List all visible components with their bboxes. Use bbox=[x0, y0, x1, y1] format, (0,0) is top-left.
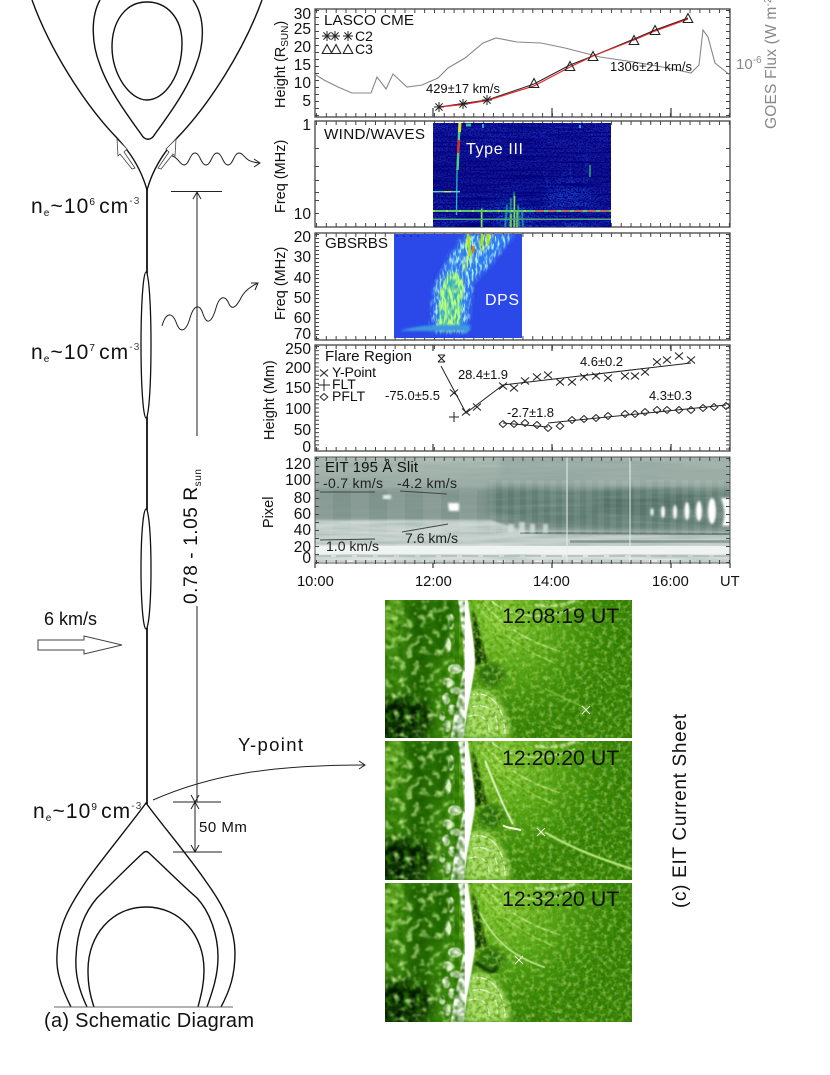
label: density 10^6: ~10 bbox=[50, 195, 89, 218]
C2 data points bbox=[434, 95, 492, 112]
y axis numbers: 50 bbox=[294, 290, 311, 307]
y axis numbers: 200 bbox=[285, 360, 311, 377]
rate labels: 28.4±1.9 bbox=[458, 367, 508, 382]
y axis title: Freq (MHz) bbox=[273, 247, 289, 320]
image: 12:32:20 UT: 12:32:20 UT bbox=[502, 887, 619, 911]
arrow: current sheet length bbox=[171, 192, 222, 802]
right axis label: -6 bbox=[753, 55, 762, 66]
panel: GBSRBS spectrogram bbox=[273, 229, 730, 343]
C3 data points bbox=[529, 14, 693, 88]
legend: FLT bbox=[332, 376, 356, 392]
rate labels: 4.6±0.2 bbox=[580, 354, 623, 369]
spectrogram image bbox=[433, 123, 611, 227]
y axis numbers: 0 bbox=[302, 550, 311, 567]
right axis label: GOES Flux (W m bbox=[763, 6, 780, 129]
label: density 10^7: cm bbox=[99, 341, 129, 364]
panel: LASCO CME height-time bbox=[273, 0, 780, 129]
time axis labels: 12:00 bbox=[415, 574, 452, 590]
label: density 10^7: n bbox=[31, 341, 44, 364]
speed labels bbox=[426, 59, 692, 96]
y axis numbers: 20 bbox=[294, 229, 311, 246]
spectrogram label: Type III bbox=[466, 141, 523, 158]
slit image bbox=[316, 458, 730, 562]
speed labels: 1306±21 km/s bbox=[610, 59, 692, 74]
label: density 10^9: cm bbox=[101, 800, 131, 823]
y axis numbers: 25 bbox=[294, 21, 311, 38]
label: density 10^6: n bbox=[31, 195, 44, 218]
time axis labels bbox=[297, 574, 740, 590]
panel frame bbox=[315, 9, 730, 117]
y axis numbers: 100 bbox=[285, 472, 311, 489]
arrow: Y-point to EIT images bbox=[153, 761, 365, 800]
legend: Y-Point bbox=[332, 364, 376, 380]
caption: EIT current sheet: (c) EIT Current Sheet bbox=[670, 713, 691, 908]
speed labels: 1.0 km/s bbox=[326, 538, 379, 554]
panel frame bbox=[315, 233, 730, 340]
label: density 10^6: -3 bbox=[129, 196, 140, 207]
label: density 10^7: 7 bbox=[89, 343, 96, 354]
PFLT data bbox=[499, 402, 730, 432]
y axis numbers bbox=[294, 6, 311, 110]
label: density 10^7: e bbox=[44, 354, 50, 365]
slit speed fit lines bbox=[320, 491, 448, 540]
spectrogram label: DPS bbox=[485, 292, 519, 309]
label: density 10^9: ~10 bbox=[52, 800, 91, 823]
y axis numbers: 50 bbox=[294, 422, 311, 439]
dimension: 50 Mm bbox=[173, 802, 247, 852]
y axis numbers: 40 bbox=[294, 522, 311, 539]
panel frame bbox=[315, 345, 730, 451]
y axis title: SUN bbox=[280, 26, 291, 47]
arrow: inflow bbox=[38, 636, 122, 654]
label: density 10^7: -3 bbox=[129, 342, 140, 353]
FLT data bbox=[449, 412, 459, 422]
time axis labels: UT bbox=[720, 574, 740, 590]
label: density 10^9: -3 bbox=[131, 801, 142, 812]
Y-point data bbox=[438, 352, 695, 416]
y axis numbers: 30 bbox=[294, 249, 311, 266]
icon: outflow arrows bbox=[117, 139, 176, 169]
image: 12:20:20 UT: 12:20:20 UT bbox=[502, 746, 619, 770]
image: 12:20:20 UT bbox=[367, 741, 632, 886]
time axis labels: 14:00 bbox=[533, 574, 570, 590]
upper flux rope loops bbox=[32, 0, 262, 190]
label: density 10^9: 9 bbox=[91, 802, 98, 813]
panel title: LASCO CME bbox=[324, 12, 414, 29]
spectrogram image bbox=[394, 234, 522, 338]
y axis numbers bbox=[294, 117, 311, 223]
y axis numbers: 5 bbox=[302, 93, 311, 110]
panel: schematic diagram bbox=[31, 0, 365, 1032]
GOES flux curve bbox=[316, 30, 730, 93]
panel title: GBSRBS bbox=[325, 235, 388, 252]
legend: C3 bbox=[355, 41, 373, 57]
y axis numbers: 70 bbox=[294, 326, 311, 343]
panel: EIT 195 slit image bbox=[261, 456, 740, 590]
y axis numbers: 0 bbox=[302, 439, 311, 456]
speed labels: -0.7 km/s bbox=[323, 475, 383, 491]
rate labels bbox=[385, 354, 692, 420]
speed labels: 429±17 km/s bbox=[426, 81, 500, 96]
y axis numbers bbox=[285, 456, 311, 567]
y axis numbers: 100 bbox=[285, 401, 311, 418]
dimension: 50 Mm: 50 Mm bbox=[199, 819, 247, 836]
label: inflow speed: 6 km/s bbox=[44, 609, 97, 629]
label: density 10^6: cm bbox=[99, 195, 129, 218]
rate labels: 4.3±0.3 bbox=[649, 388, 692, 403]
panel frame bbox=[315, 121, 730, 227]
y axis title: Freq (MHz) bbox=[273, 140, 289, 213]
rate labels: -75.0±5.5 bbox=[385, 388, 440, 403]
y axis numbers: 150 bbox=[285, 380, 311, 397]
label: density 10^6: 6 bbox=[89, 197, 96, 208]
arrow: type III radio emission wave bbox=[172, 153, 260, 167]
caption: schematic diagram: (a) Schematic Diagram bbox=[44, 1010, 254, 1032]
panel title: EIT 195 Å Slit bbox=[325, 459, 419, 476]
label: density 10^7: ~10 bbox=[50, 341, 89, 364]
y axis numbers: 120 bbox=[285, 456, 311, 473]
image: 12:32:20 UT bbox=[367, 883, 632, 1028]
y axis title: Height (R bbox=[273, 47, 289, 108]
time axis labels: 16:00 bbox=[652, 574, 689, 590]
rate labels: -2.7±1.8 bbox=[507, 405, 554, 420]
panel title: WIND/WAVES bbox=[324, 126, 425, 143]
legend bbox=[322, 28, 373, 57]
y axis numbers: 30 bbox=[294, 6, 311, 23]
CME fit lines bbox=[439, 18, 688, 107]
legend: PFLT bbox=[332, 388, 366, 404]
speed labels: 7.6 km/s bbox=[405, 530, 458, 546]
panel: WIND/WAVES spectrogram bbox=[273, 117, 730, 234]
legend bbox=[318, 364, 376, 404]
y axis numbers bbox=[285, 341, 311, 456]
speed labels bbox=[323, 475, 458, 554]
right axis label: 10 bbox=[736, 56, 753, 73]
label: Y-point: Y-point bbox=[238, 734, 303, 755]
image: 12:08:19 UT bbox=[367, 600, 632, 744]
legend: C2 bbox=[355, 28, 373, 44]
y axis numbers: 10 bbox=[294, 206, 311, 223]
time axis labels: 10:00 bbox=[297, 574, 334, 590]
label: density 10^6: e bbox=[44, 208, 50, 219]
panel: flare region heights bbox=[262, 341, 730, 456]
y axis numbers: 80 bbox=[294, 490, 311, 507]
panel frame bbox=[315, 457, 730, 568]
label: density 10^9: n bbox=[33, 800, 46, 823]
fit lines bbox=[441, 363, 726, 427]
y axis title: Pixel bbox=[261, 497, 277, 528]
arrow: DPS radio emission wave bbox=[162, 283, 258, 330]
right axis label bbox=[736, 0, 780, 129]
y axis numbers bbox=[294, 229, 311, 343]
y axis numbers: 250 bbox=[285, 341, 311, 358]
panel: EIT current sheet images bbox=[367, 600, 691, 1028]
panel title: Flare Region bbox=[325, 348, 412, 365]
lower post-flare loops bbox=[54, 803, 235, 1007]
label: current sheet length: sun bbox=[193, 468, 204, 486]
current sheet with plasmoids bbox=[141, 188, 151, 804]
y axis numbers: 20 bbox=[294, 39, 311, 56]
y axis title: ) bbox=[273, 21, 289, 26]
y axis numbers: 10 bbox=[294, 75, 311, 92]
label: density 10^9: e bbox=[46, 813, 52, 824]
speed labels: -4.2 km/s bbox=[397, 475, 457, 491]
y axis numbers: 20 bbox=[294, 539, 311, 556]
label: current sheet length: 0.78 - 1.05 R bbox=[181, 486, 202, 604]
y axis numbers: 15 bbox=[294, 57, 311, 74]
y axis numbers: 40 bbox=[294, 270, 311, 287]
y axis numbers: 60 bbox=[294, 506, 311, 523]
y axis numbers: 1 bbox=[302, 117, 311, 134]
image: 12:08:19 UT: 12:08:19 UT bbox=[502, 604, 619, 628]
y axis numbers: 60 bbox=[294, 310, 311, 327]
y axis title: Height (Mm) bbox=[262, 360, 278, 440]
